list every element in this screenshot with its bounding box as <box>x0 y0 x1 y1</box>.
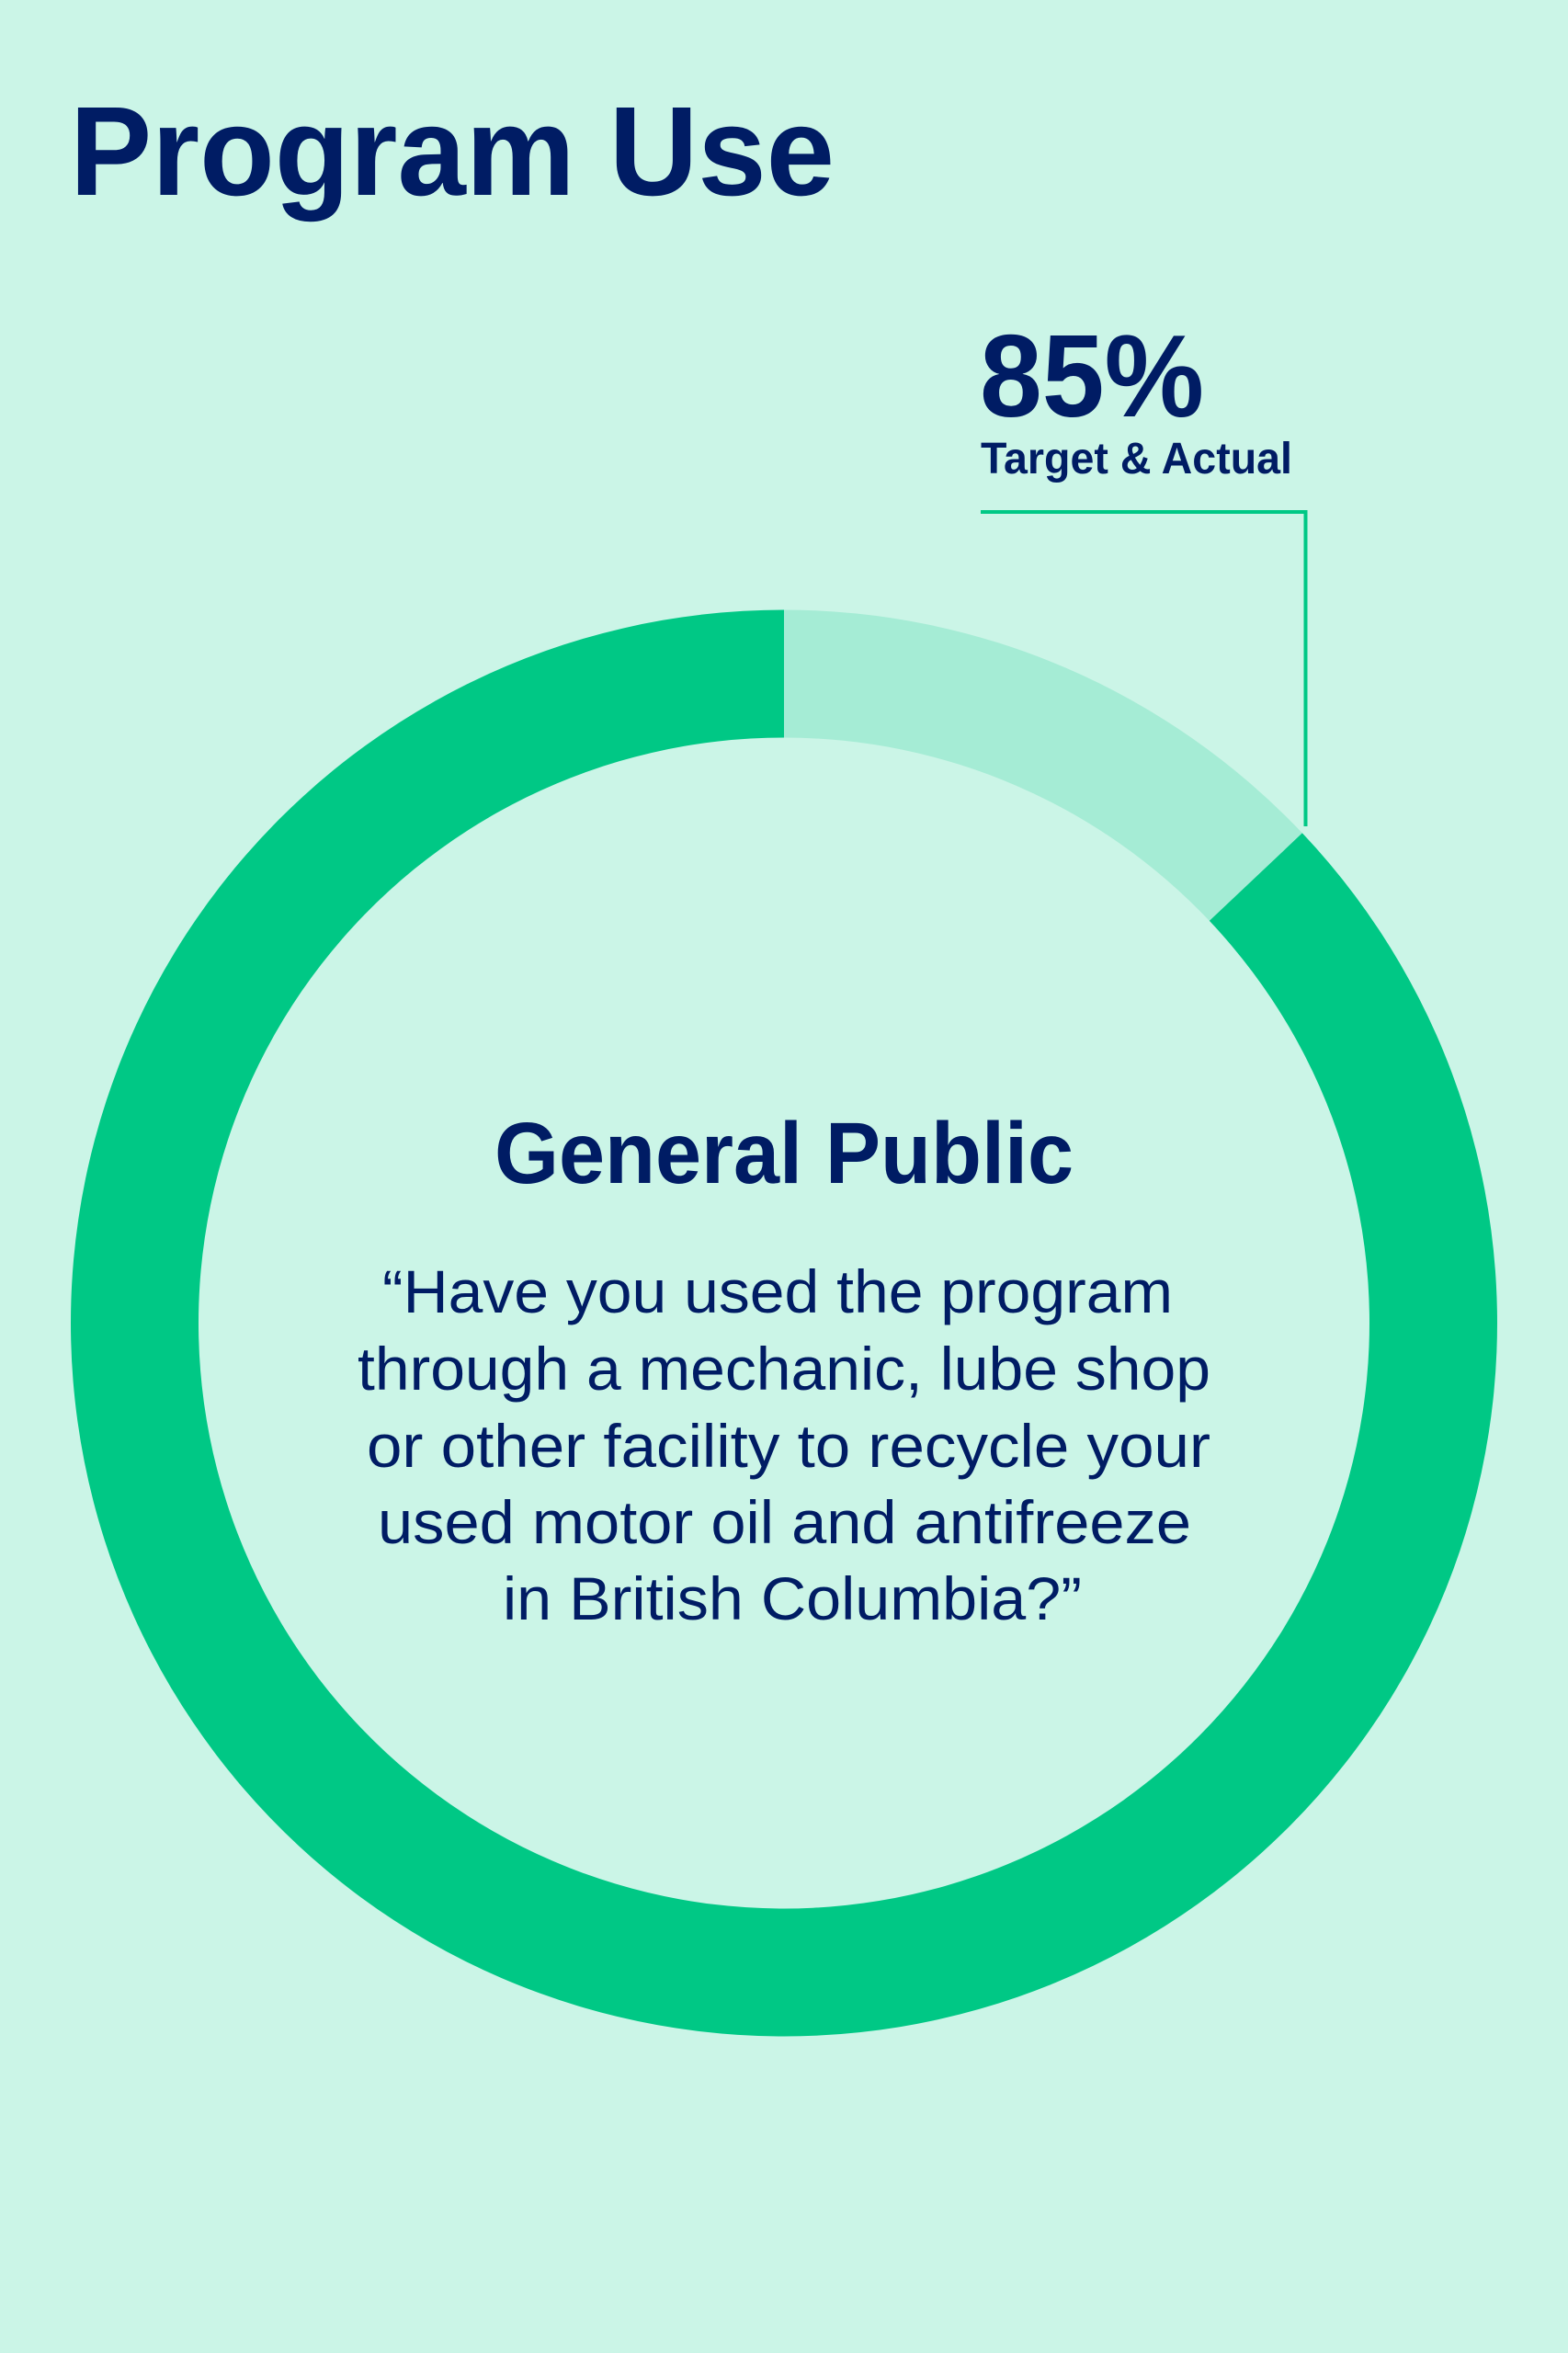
donut chart <box>71 610 1497 2037</box>
donut segment: remainder <box>784 610 1302 921</box>
donut segment: 85% <box>71 610 1497 2037</box>
centre question text <box>358 1257 1210 1632</box>
centre heading: General Public <box>494 1105 1074 1202</box>
centre question text: through a mechanic, lube shop <box>358 1335 1210 1403</box>
title: Program Use <box>70 81 835 222</box>
callout: 85% target and actual <box>980 311 1305 826</box>
callout value: 85% <box>980 311 1204 441</box>
callout label: Target & Actual <box>981 435 1292 483</box>
centre question text: in British Columbia?” <box>503 1564 1082 1632</box>
centre question text: “Have you used the program <box>382 1257 1173 1325</box>
centre question text: used motor oil and antifreeze <box>378 1488 1191 1556</box>
callout leader line <box>981 512 1305 826</box>
centre question text: or other facility to recycle your <box>367 1412 1210 1480</box>
